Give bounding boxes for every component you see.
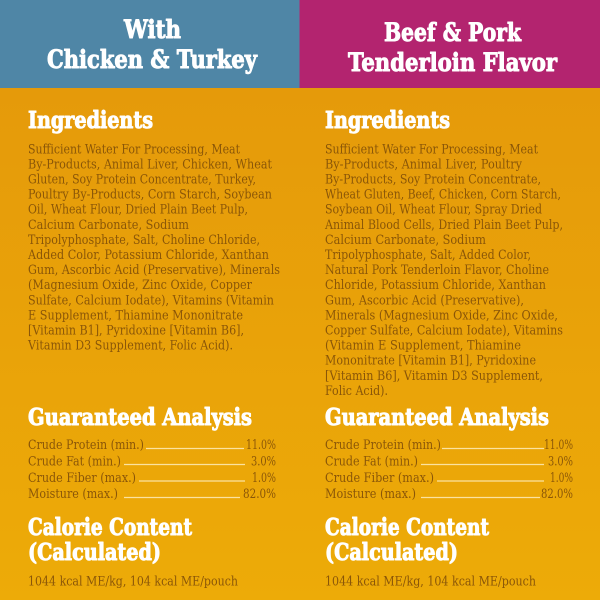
- ingredients list right: [Vitamin B6], Vitamin D3 Supplement,: [325, 369, 543, 384]
- calorie text right: 1044 kcal ME/kg, 104 kcal ME/pouch: [325, 575, 537, 590]
- analysis table right: 1.0%: [550, 471, 573, 486]
- ingredients list right: Soybean Oil, Wheat Flour, Spray Dried: [325, 203, 542, 218]
- header: chicken and turkey: [0, 0, 300, 88]
- analysis table right: [325, 438, 573, 502]
- ingredients list right: Sufficient Water For Processing, Meat: [325, 142, 539, 157]
- analysis table left: Moisture (max.): [28, 487, 118, 502]
- heading: guaranteed analysis left: Guaranteed Analysis: [28, 404, 252, 431]
- ingredients list right: Calcium Carbonate, Sodium: [325, 233, 486, 248]
- header: chicken and turkey: Chicken & Turkey: [47, 45, 258, 74]
- ingredients list left: E Supplement, Thiamine Mononitrate: [28, 308, 243, 323]
- ingredients list right: Animal Blood Cells, Dried Plain Beet Pulp,: [324, 218, 563, 233]
- heading: calorie content left: Calorie Content: [28, 514, 192, 541]
- ingredients list right: Minerals (Magnesium Oxide, Zinc Oxide,: [325, 308, 558, 323]
- analysis table left: [28, 438, 276, 502]
- ingredients list left: Added Color, Potassium Chloride, Xanthan: [27, 248, 270, 263]
- ingredients list left: Gluten, Soy Protein Concentrate, Turkey,: [28, 172, 256, 188]
- ingredients list left: Tripolyphosphate, Salt, Choline Chloride,: [28, 233, 260, 248]
- heading: calorie content right: Calorie Content: [325, 514, 489, 541]
- ingredients list left: Oil, Wheat Flour, Dried Plain Beet Pulp,: [28, 203, 248, 218]
- ingredients list right: (Vitamin E Supplement, Thiamine: [325, 339, 521, 354]
- analysis table left: 82.0%: [243, 487, 276, 502]
- ingredients list right: Natural Pork Tenderloin Flavor, Choline: [325, 263, 549, 278]
- ingredients list right: Mononitrate [Vitamin B1], Pyridoxine: [325, 354, 536, 369]
- ingredients list right: By-Products, Animal Liver, Poultry: [325, 157, 523, 172]
- analysis table right: 3.0%: [548, 454, 573, 470]
- ingredients list left: Poultry By-Products, Corn Starch, Soybean: [28, 188, 273, 203]
- ingredients list right: Folic Acid).: [325, 384, 388, 399]
- ingredients list right: Chloride, Potassium Chloride, Xanthan: [325, 278, 547, 293]
- heading: guaranteed analysis right: Guaranteed Analysis: [325, 404, 549, 431]
- ingredients list right: By-Products, Soy Protein Concentrate,: [325, 172, 541, 188]
- ingredients list left: By-Products, Animal Liver, Chicken, Wheat: [28, 157, 273, 172]
- ingredients list left: Gum, Ascorbic Acid (Preservative), Minerals: [28, 263, 280, 278]
- heading: ingredients right: Ingredients: [325, 107, 450, 134]
- analysis table right: 11.0%: [544, 438, 573, 453]
- header: beef and pork: [300, 0, 600, 88]
- analysis table right: Crude Fiber (max.): [325, 471, 434, 486]
- ingredients list left: (Magnesium Oxide, Zinc Oxide, Copper: [28, 278, 253, 293]
- analysis table left: 3.0%: [251, 454, 276, 470]
- analysis table left: 1.0%: [252, 471, 276, 486]
- heading: calorie content right: [325, 514, 489, 566]
- header: beef and pork: Beef & Pork: [384, 18, 522, 47]
- analysis table right: Crude Protein (min.): [325, 438, 441, 453]
- ingredients list left: Calcium Carbonate, Sodium: [28, 218, 189, 233]
- ingredients list right: Wheat Gluten, Beef, Chicken, Corn Starch,: [325, 188, 561, 203]
- heading: calorie content right: (Calculated): [325, 539, 458, 566]
- analysis table left: Crude Fiber (max.): [28, 471, 136, 486]
- calorie text left: 1044 kcal ME/kg, 104 kcal ME/pouch: [28, 575, 239, 590]
- ingredients list right: Tripolyphosphate, Salt, Added Color,: [325, 248, 531, 263]
- ingredients list right: Copper Sulfate, Calcium Iodate), Vitamins: [325, 324, 563, 338]
- analysis table left: Crude Protein (min.): [28, 438, 144, 453]
- analysis table left: Crude Fat (min.): [28, 454, 121, 470]
- heading: calorie content left: (Calculated): [28, 539, 161, 566]
- ingredients list right: [324, 142, 563, 399]
- ingredients list left: Vitamin D3 Supplement, Folic Acid).: [27, 339, 233, 354]
- ingredients list left: [27, 142, 280, 354]
- ingredients list left: [Vitamin B1], Pyridoxine [Vitamin B6],: [28, 324, 244, 338]
- heading: ingredients left: Ingredients: [28, 107, 153, 134]
- heading: calorie content left: [28, 514, 192, 566]
- ingredients list left: Sufficient Water For Processing, Meat: [28, 142, 241, 157]
- ingredients list right: Gum, Ascorbic Acid (Preservative),: [325, 293, 524, 308]
- analysis table left: 11.0%: [246, 438, 276, 453]
- analysis table right: 82.0%: [541, 487, 573, 502]
- header: chicken and turkey: With: [123, 15, 181, 44]
- ingredients list left: Sulfate, Calcium Iodate), Vitamins (Vitamin: [28, 293, 275, 308]
- analysis table right: Crude Fat (min.): [325, 454, 418, 470]
- analysis table right: Moisture (max.): [325, 487, 416, 502]
- header: beef and pork: Tenderloin Flavor: [348, 48, 558, 77]
